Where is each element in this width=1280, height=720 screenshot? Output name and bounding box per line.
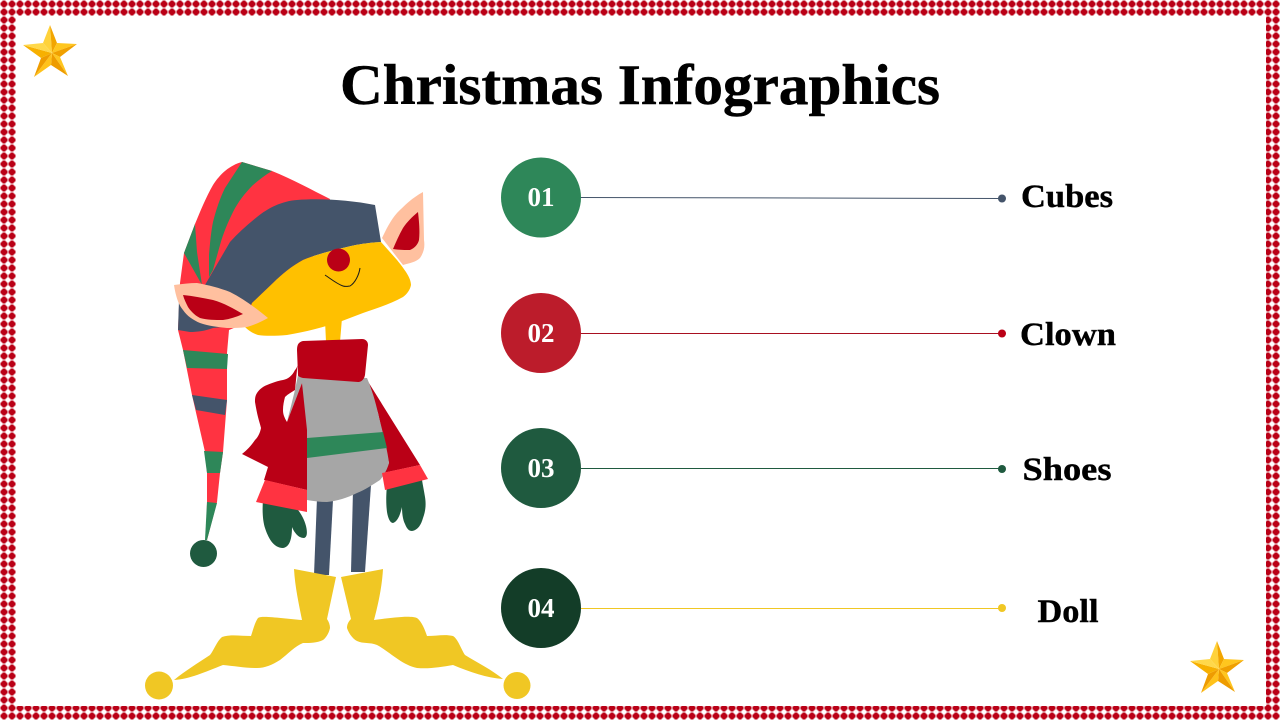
scarf [297,339,368,382]
item 03: Shoes: Shoes [1022,452,1112,488]
icon: gold star top left [23,25,77,77]
body stripe [307,432,387,458]
body [287,375,389,502]
item 04: Doll: Doll [1038,594,1098,630]
scarf tail and left sleeve [242,360,307,490]
hat pompom [190,540,217,567]
item 02: Clown [501,293,1116,373]
icon: gold star bottom right [1190,641,1244,693]
right sleeve [367,380,420,473]
nose [327,248,350,272]
item 04: Doll: 04 [528,593,554,623]
item 03: Shoes: 03 [528,453,554,483]
left leg [314,498,333,575]
item 01: Cubes: Cubes [1021,179,1113,215]
item 02: Clown: 02 [528,318,554,348]
right ear [382,192,424,265]
item 01: Cubes [501,158,1113,238]
right mitten [386,480,426,531]
right boot bell [504,672,530,699]
elf hat [178,162,381,540]
item 02: Clown: Clown [1020,317,1116,353]
left mitten [263,500,307,548]
smile [325,268,360,286]
item 04: Doll [501,568,1098,648]
left cuff [256,480,307,512]
right cuff [382,465,428,490]
title: Christmas Infographics [340,54,940,117]
elf neck [325,318,342,342]
left boot [174,569,336,680]
left ear [174,283,268,328]
item 01: Cubes: 01 [528,182,554,212]
right leg [351,485,371,572]
left boot bell [145,672,173,700]
right boot [341,569,503,679]
elf face [245,242,411,336]
item 03: Shoes [501,428,1112,508]
elf illustration [145,162,530,700]
